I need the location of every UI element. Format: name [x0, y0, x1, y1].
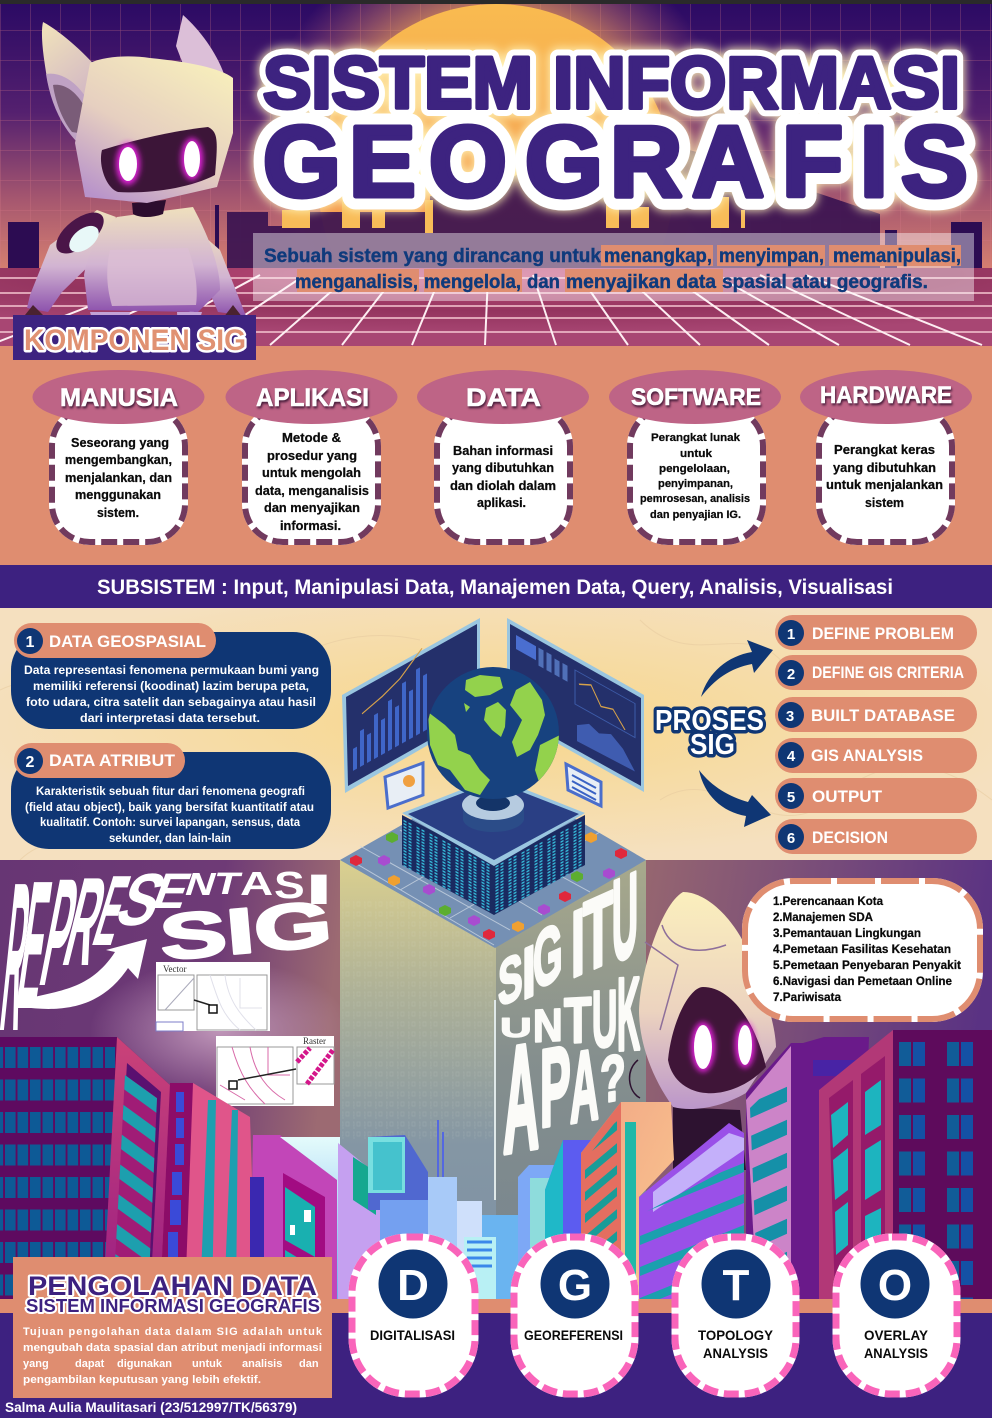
panel: pengolahan data: SISTEM INFORMASI GEOGRAFIS	[26, 1296, 320, 1316]
panel: data atribut: sekunder, dan lain-lain	[109, 833, 231, 845]
panel: pengolahan data: untuk	[192, 1358, 223, 1370]
globe	[427, 667, 560, 799]
step 6: decision: 6	[787, 830, 795, 847]
arrow: representasi	[22, 939, 147, 1009]
text: SIG itu untuk apa: ?	[600, 1039, 626, 1117]
card: manusia: MANUSIA	[60, 384, 178, 412]
subtitle definition band: mengelola,	[424, 272, 521, 293]
card: software: pengelolaan,	[659, 463, 730, 475]
card: software: pemrosesan, analisis	[640, 493, 750, 505]
card: topology analysis: ANALYSIS	[703, 1345, 768, 1361]
title: representasi SIG: T	[210, 866, 245, 901]
figure: raster map	[216, 1036, 334, 1106]
title: representasi SIG: R	[53, 852, 117, 993]
card: aplikasi	[226, 370, 398, 542]
step 3: built database	[775, 697, 977, 732]
subtitle definition band	[253, 233, 974, 301]
step 4: gis analysis: 4	[787, 748, 796, 765]
card: digitalisasi: D	[397, 1261, 429, 1310]
monitor right	[507, 618, 644, 792]
card: manusia	[32, 370, 204, 542]
step 6: decision: DECISION	[812, 828, 888, 847]
callout: kegunaan SIG: 2.Manajemen SDA	[773, 912, 873, 924]
card: software: Perangkat lunak	[651, 432, 741, 444]
panel: data geospasial: Data representasi fenomena permukaan bumi yang	[24, 663, 319, 677]
heading: proses SIG: PROSES	[655, 705, 764, 737]
panel: pengolahan data: dapat	[75, 1358, 105, 1370]
card: topology analysis	[675, 1237, 796, 1394]
panel: data geospasial: dari interpretasi data tersebut.	[80, 711, 260, 725]
step 4: gis analysis: GIS ANALYSIS	[811, 746, 923, 765]
panel: pengolahan data: digunakan	[117, 1358, 172, 1370]
heading: proses SIG	[655, 705, 764, 761]
panel: data geospasial: DATA GEOSPASIAL	[49, 632, 206, 651]
card: topology analysis: T	[723, 1261, 750, 1310]
panel: bottom section purple background	[0, 860, 992, 1300]
card: software: penyimpanan,	[658, 478, 733, 490]
text: SIG itu untuk apa: T	[583, 870, 613, 995]
title: representasi SIG: E	[83, 856, 139, 967]
illustration: center city and street	[280, 1102, 674, 1300]
card: hardware: yang dibutuhkan	[833, 460, 936, 475]
illustration: left city buildings	[0, 1037, 337, 1300]
callout: kegunaan SIG: 6.Navigasi dan Pemetaan Online	[773, 976, 952, 988]
text: SIG itu untuk apa: N	[533, 1000, 563, 1053]
step 1: define problem: 1	[787, 626, 795, 643]
card: aplikasi: informasi.	[280, 518, 341, 533]
card: aplikasi: dan menyajikan	[264, 500, 360, 515]
card: manusia: sistem.	[97, 505, 139, 520]
card: data	[417, 370, 589, 542]
subtitle definition band: spasial atau geografis.	[722, 272, 928, 293]
title: GEOGRAFIS	[263, 106, 968, 218]
title: representasi SIG: P	[30, 847, 88, 1019]
text: SIG itu untuk apa: I	[522, 929, 536, 1016]
hero background scene	[0, 4, 992, 346]
card: aplikasi: APLIKASI	[256, 384, 369, 412]
callout: kegunaan SIG: 7.Pariwisata	[773, 992, 842, 1004]
arrow: down to process list	[699, 770, 771, 827]
title: SISTEM INFORMASI	[263, 43, 960, 124]
server block	[402, 777, 585, 915]
subtitle definition band: dan	[527, 272, 560, 293]
panel: data atribut: kualitatif. Contoh: survei lapangan, sensus, data	[40, 817, 301, 829]
text: SIG itu untuk apa: S	[498, 940, 523, 1021]
step 4: gis analysis	[775, 738, 977, 773]
text: SIG itu untuk apa: G	[533, 904, 563, 1008]
illustration: pillar	[340, 860, 646, 1300]
title: representasi SIG: E	[8, 844, 60, 1048]
panel: data atribut	[11, 743, 331, 849]
card: overlay analysis	[836, 1237, 957, 1394]
panel: cream section background	[0, 608, 992, 860]
title: representasi SIG: I	[304, 866, 334, 913]
text: SIG itu untuk apa	[498, 848, 640, 1185]
text: SIG itu untuk apa: K	[617, 957, 640, 1073]
card: manusia: menjalankan, dan	[65, 470, 172, 485]
arrow: up to process list	[701, 640, 773, 697]
subtitle definition band: menyajikan data	[566, 272, 716, 293]
panel: pengolahan data	[13, 1257, 332, 1398]
card: data: Bahan informasi	[453, 443, 553, 458]
card: manusia: menggunakan	[75, 487, 161, 502]
panel: pengolahan data: dan	[299, 1358, 319, 1370]
monitor left	[342, 618, 480, 793]
text: SIG itu untuk apa: P	[540, 1023, 571, 1150]
panel: komponen background	[0, 346, 992, 565]
illustration: robot mascot top left	[22, 15, 246, 332]
banner: subsistem: SUBSISTEM : Input, Manipulasi Data, Manajemen Data, Query, Analisis, Visualisasi	[97, 576, 893, 599]
panel: data atribut: 2	[26, 754, 35, 771]
title	[263, 43, 968, 218]
panel: data geospasial: 1	[26, 634, 35, 651]
card: overlay analysis: ANALYSIS	[864, 1345, 928, 1361]
text: SIG itu untuk apa: T	[564, 984, 592, 1057]
text: SIG itu untuk apa: U	[592, 974, 617, 1065]
text: SIG itu untuk apa: U	[500, 1012, 532, 1043]
card: digitalisasi	[352, 1237, 475, 1394]
subtitle definition band: menyimpan,	[719, 246, 824, 267]
base platform	[340, 772, 646, 948]
panel: pengolahan data: pengambilan keputusan yang lebih efektif.	[23, 1374, 261, 1386]
callout: kegunaan SIG: 1.Perencanaan Kota	[773, 896, 884, 908]
illustration: right city buildings	[639, 1030, 992, 1300]
step 2: define gis criteria: 2	[787, 666, 795, 683]
card: georeferensi: GEOREFERENSI	[524, 1327, 623, 1343]
panel: data geospasial	[11, 623, 331, 729]
panel: pengolahan data: analisis	[242, 1358, 282, 1370]
heading: komponen SIG	[13, 315, 256, 360]
figure: raster map: Raster	[303, 1036, 326, 1046]
card: topology analysis: TOPOLOGY	[698, 1327, 774, 1343]
top dark edge	[0, 0, 992, 4]
panel: pengolahan data: yang	[23, 1358, 49, 1370]
card: manusia: mengembangkan,	[65, 452, 172, 467]
panel: data atribut: DATA ATRIBUT	[49, 751, 176, 770]
step 2: define gis criteria: DEFINE GIS CRITERIA	[812, 663, 964, 682]
title: SISTEM INFORMASI	[263, 43, 960, 124]
card: data: DATA	[466, 384, 541, 412]
card: hardware: Perangkat keras	[834, 442, 935, 457]
title: GEOGRAFIS	[263, 106, 968, 218]
step 6: decision	[775, 819, 977, 854]
card: data: dan diolah dalam	[450, 478, 556, 493]
banner: subsistem	[0, 565, 992, 608]
panel: data atribut: Karakteristik sebuah fitur dari fenomena geografi	[36, 786, 305, 798]
card: overlay analysis: O	[878, 1261, 912, 1310]
subtitle definition band: menangkap,	[604, 246, 712, 267]
card: georeferensi	[514, 1237, 635, 1394]
subtitle definition band: menganalisis,	[295, 272, 418, 293]
callout: kegunaan SIG: 4.Pemetaan Fasilitas Kesehatan	[773, 944, 951, 956]
panel: data geospasial: memiliki referensi (koodinat) lazim berupa peta,	[33, 679, 309, 693]
heading: komponen SIG: KOMPONEN SIG	[24, 324, 246, 357]
text: SIG itu untuk apa: I	[571, 889, 585, 999]
subtitle definition band: memanipulasi,	[833, 246, 961, 267]
card: digitalisasi: DIGITALISASI	[370, 1327, 455, 1343]
card: aplikasi: data, menganalisis	[255, 483, 369, 498]
callout: kegunaan SIG	[745, 881, 980, 1019]
ring base	[462, 790, 524, 832]
cubes	[350, 832, 627, 940]
card: data: yang dibutuhkan	[452, 460, 554, 475]
card: software: dan penyajian IG.	[650, 509, 741, 521]
card: software: SOFTWARE	[631, 384, 761, 411]
panel: data geospasial: foto udara, citra satelit dan sebagainya atau hasil	[26, 695, 316, 709]
illustration: monitors, globe and server	[340, 618, 646, 948]
panel: pengolahan data: mengubah data spasial dan atribut menjadi informasi	[23, 1342, 322, 1354]
step 5: output: OUTPUT	[812, 787, 883, 806]
illustration: robot mascot right	[630, 892, 776, 1170]
step 5: output	[775, 778, 977, 813]
panel chips	[385, 763, 601, 808]
text: SIG itu untuk apa: A	[570, 1029, 599, 1145]
card: hardware: untuk menjalankan	[826, 477, 943, 492]
bottom color bands	[0, 1299, 992, 1418]
title: representasi SIG: A	[240, 866, 273, 902]
step 3: built database: 3	[786, 708, 794, 725]
callout: kegunaan SIG: 5.Pemetaan Penyebaran Penyakit	[773, 960, 961, 972]
card: software	[609, 370, 781, 542]
step 2: define gis criteria	[775, 655, 977, 690]
callout: kegunaan SIG: 3.Pemantauan Lingkungan	[773, 928, 921, 940]
text: SIG itu untuk apa: U	[612, 848, 638, 988]
title: representasi SIG: S	[106, 858, 178, 941]
panel: pengolahan data: Tujuan pengolahan data dalam SIG adalah untuk	[23, 1326, 323, 1338]
figure: vector map	[156, 962, 270, 1031]
card: georeferensi: G	[558, 1261, 592, 1310]
step 1: define problem	[775, 615, 977, 650]
step 5: output: 5	[787, 789, 795, 806]
heading: proses SIG: SIG	[690, 729, 735, 761]
card: manusia: Seseorang yang	[71, 435, 169, 450]
title: representasi SIG: N	[181, 866, 221, 902]
title: representasi SIG	[0, 839, 335, 1076]
card: aplikasi: untuk mengolah	[262, 465, 361, 480]
card: hardware: sistem	[865, 495, 904, 510]
card: overlay analysis: OVERLAY	[864, 1327, 929, 1343]
card: software: untuk	[680, 448, 713, 460]
panel: pengolahan data: PENGOLAHAN DATA	[28, 1271, 317, 1301]
step 3: built database: BUILT DATABASE	[811, 706, 955, 725]
panel: data atribut: (field atau object), baik yang bersifat kuantitatif atau	[25, 802, 314, 814]
card: aplikasi: prosedur yang	[267, 448, 357, 463]
title: representasi SIG: E	[146, 863, 199, 919]
subtitle definition band: Sebuah sistem yang dirancang untuk	[264, 246, 601, 267]
text: SIG itu untuk apa: A	[503, 1011, 539, 1185]
title: representasi SIG: S	[274, 864, 305, 906]
title: GEOGRAFIS	[263, 106, 968, 218]
card: data: aplikasi.	[477, 495, 526, 510]
card: hardware	[800, 370, 972, 542]
card: aplikasi: Metode &	[282, 430, 341, 445]
step 1: define problem: DEFINE PROBLEM	[812, 624, 954, 643]
title: representasi SIG: SIG	[157, 887, 335, 974]
title: SISTEM INFORMASI	[263, 43, 960, 124]
figure: vector map: Vector	[163, 964, 186, 974]
card: hardware: HARDWARE	[820, 382, 952, 409]
author credit: Salma Aulia Maulitasari (23/512997/TK/56379)	[5, 1399, 297, 1415]
